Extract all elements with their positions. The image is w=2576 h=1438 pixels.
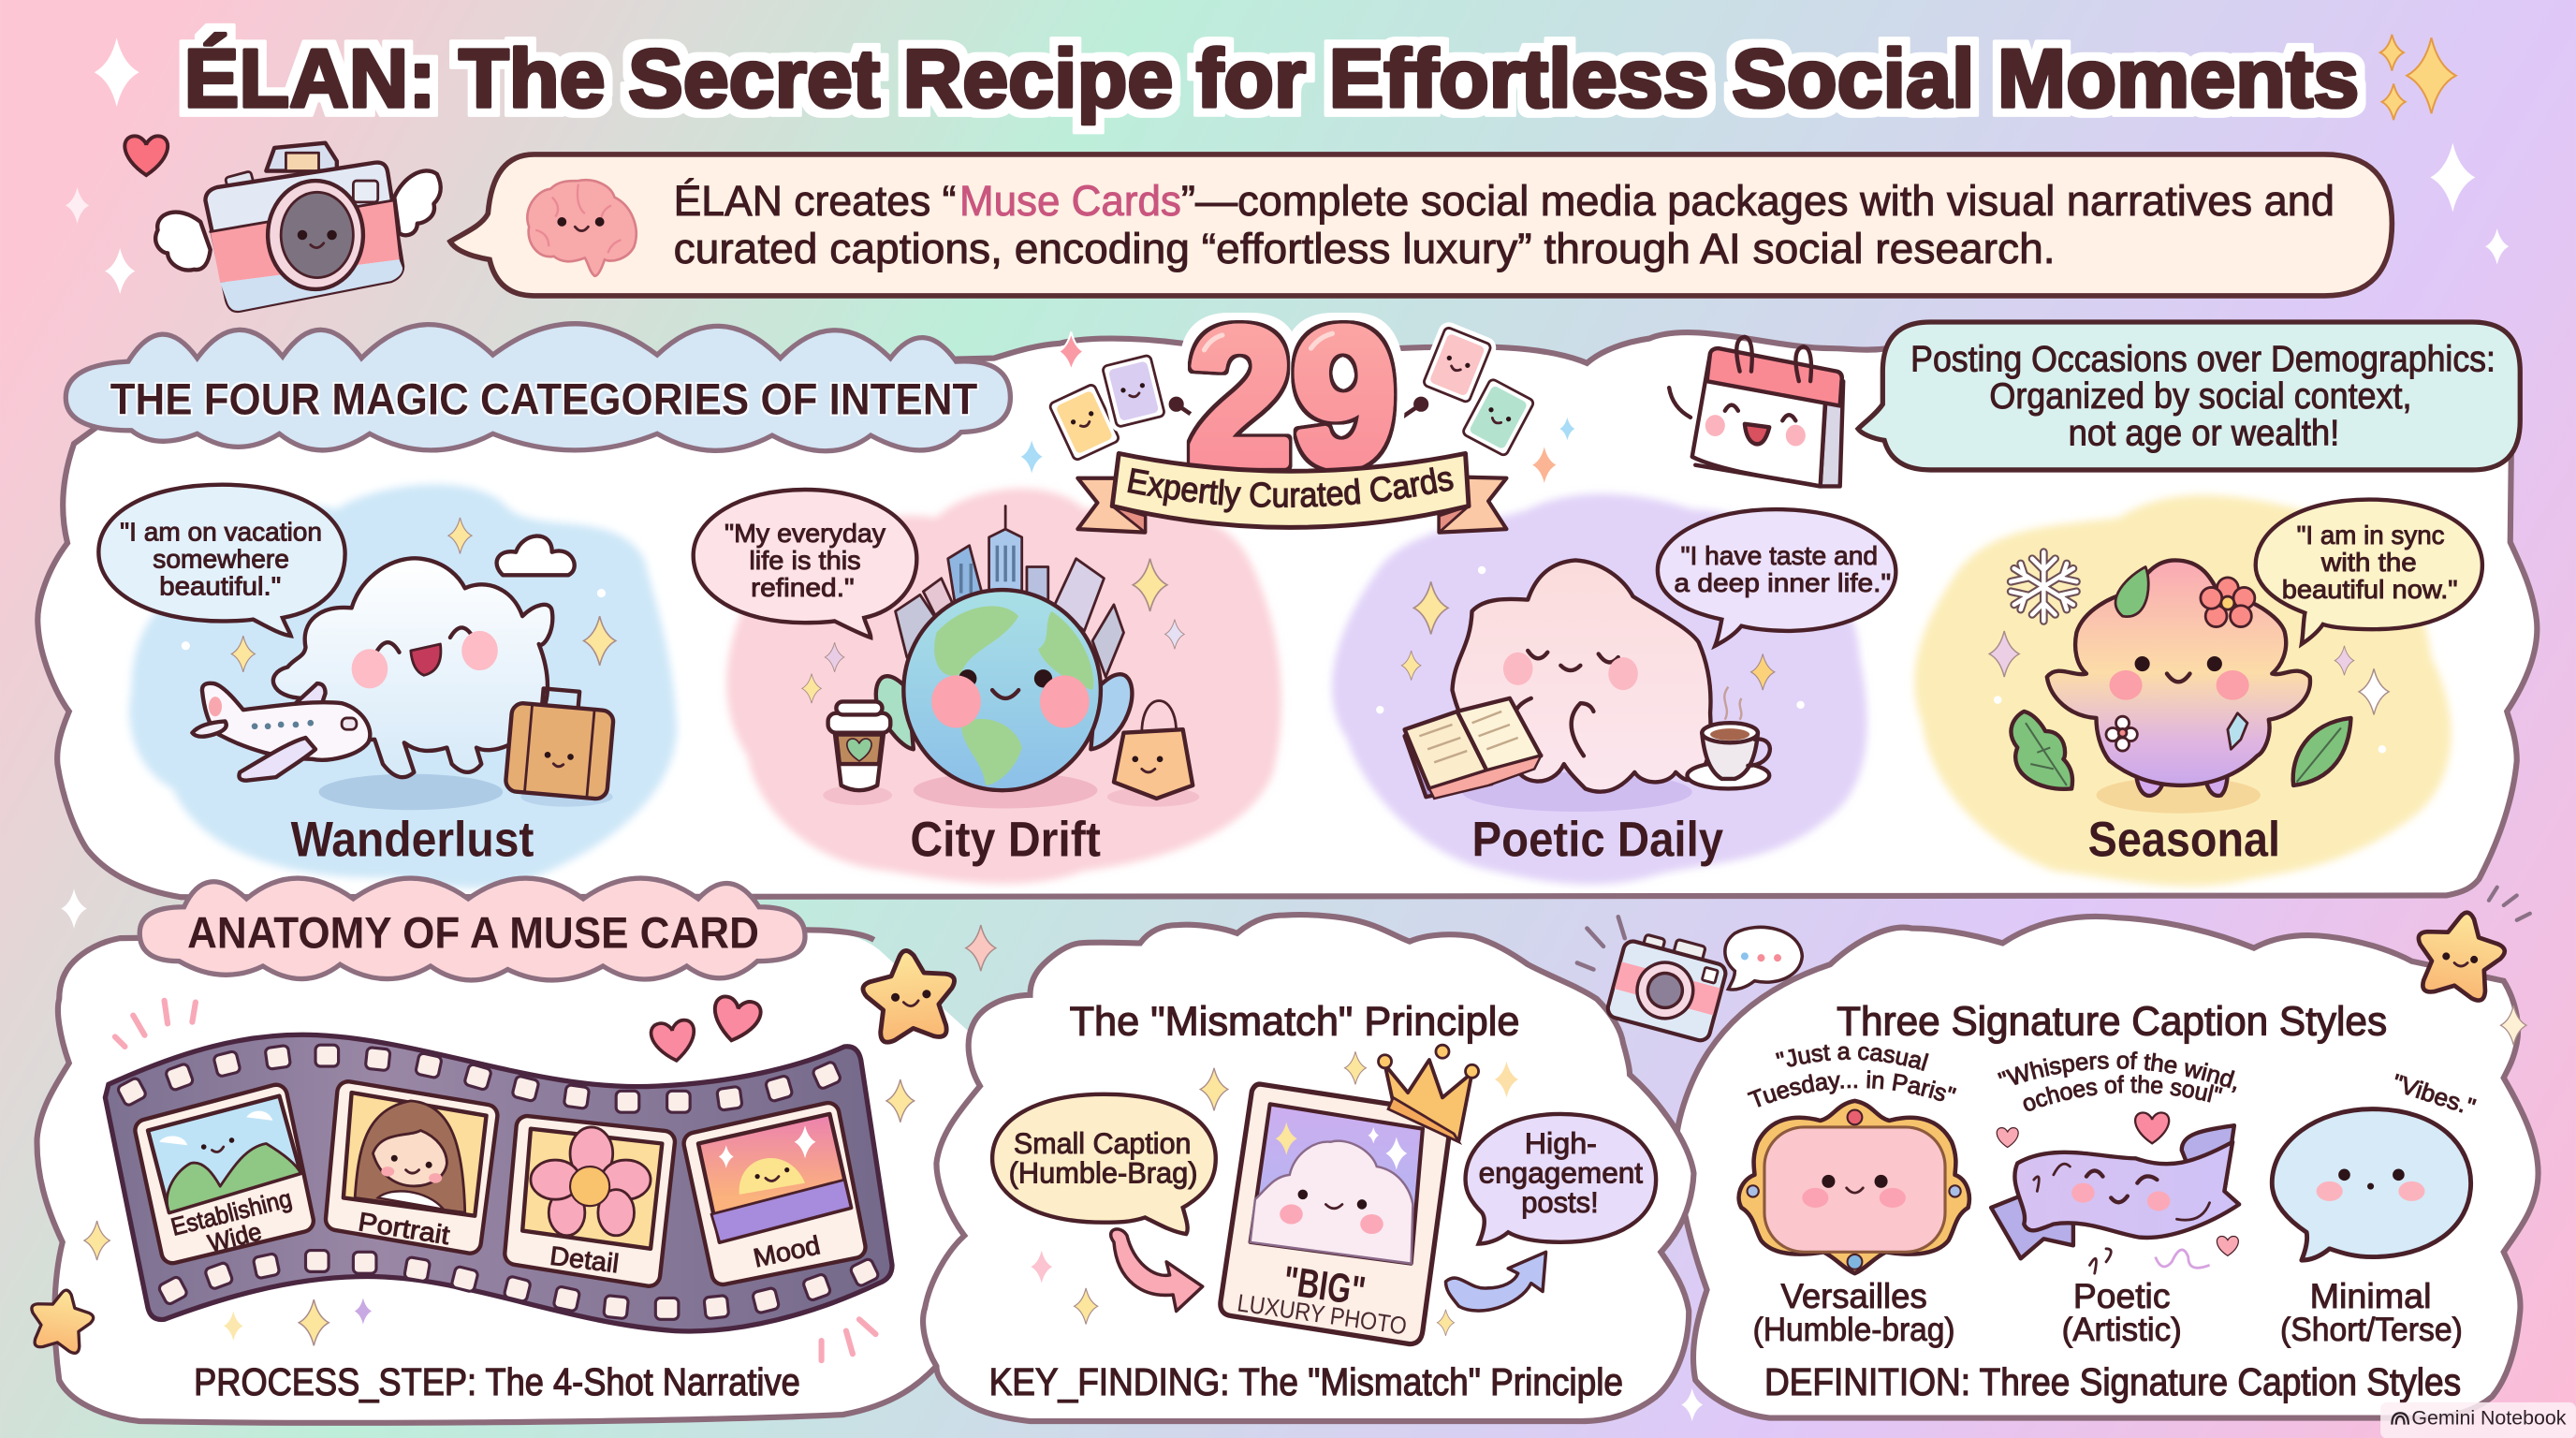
photo card: "BIG" xyxy=(1281,1257,1368,1314)
panel: Poetic Daily xyxy=(1332,493,1895,885)
icon: sparkles around 29 xyxy=(1021,332,1574,483)
frame: establishing wide: Establishing xyxy=(168,1184,295,1241)
panel: City Drift xyxy=(694,489,1281,884)
icon: snowflake xyxy=(2011,552,2076,621)
heading: four magic categories cloud: THE FOUR MAGIC CATEGORIES OF INTENT xyxy=(110,374,977,424)
quote bubble: City Drift: "My everyday xyxy=(724,519,886,548)
icon: sparkles xyxy=(1989,631,2389,754)
icon: suitcase mascot xyxy=(505,686,616,800)
quote bubble: Poetic Daily: a deep inner life." xyxy=(1674,568,1891,597)
caption: key finding: KEY_FINDING: The "Mismatch" Principle xyxy=(989,1360,1623,1403)
icon: sparkles xyxy=(84,1079,915,1345)
frame: mood xyxy=(695,1114,855,1273)
title: ÉLAN: The Secret Recipe for Effortless Social Moments xyxy=(184,33,2359,125)
quote bubble: Seasonal xyxy=(2256,500,2482,644)
small caption bubble: (Humble-Brag) xyxy=(1009,1156,1197,1190)
panel: Wanderlust xyxy=(98,484,677,888)
small caption bubble: Small Caption xyxy=(1014,1126,1191,1160)
style: Poetic xyxy=(1988,1051,2241,1348)
badge: Gemini Notebook: Gemini Notebook xyxy=(2411,1408,2567,1430)
label: Wanderlust: Wanderlust xyxy=(291,812,534,867)
heading: anatomy cloud: ANATOMY OF A MUSE CARD xyxy=(187,909,759,959)
icon: small star bottom left xyxy=(25,1284,97,1356)
quote bubble: Seasonal: "I am in sync xyxy=(2297,521,2445,550)
intro text xyxy=(674,177,2334,272)
label: Seasonal: Seasonal xyxy=(2088,812,2280,867)
icon: gold sparkles beside title xyxy=(2380,35,2456,120)
filmstrip xyxy=(105,1034,892,1331)
callout: 29 expertly curated cards xyxy=(1021,288,1574,535)
photo card xyxy=(1221,1084,1451,1344)
icon: small camera with chat bubble xyxy=(1577,917,1802,1043)
title: mismatch principle: The "Mismatch" Principle xyxy=(1070,999,1519,1045)
frame: detail: Detail xyxy=(549,1241,621,1278)
quote bubble: City Drift: refined." xyxy=(751,573,855,602)
icon: sparkles xyxy=(1031,1051,1518,1336)
panel: intro speech bubble xyxy=(450,154,2392,296)
icon: blue bubble xyxy=(2272,1109,2471,1260)
icon: happy cloud xyxy=(273,558,552,777)
icon: flying mini cards xyxy=(1048,327,1535,461)
engagement bubble: posts! xyxy=(1521,1185,1599,1219)
quote bubble: Poetic Daily xyxy=(1658,509,1895,646)
icon: brain mascot xyxy=(527,180,637,276)
arrow: caption to photo xyxy=(1111,1229,1203,1312)
quote bubble: Wanderlust: somewhere xyxy=(153,544,289,573)
heading: anatomy cloud xyxy=(139,878,805,980)
intro text: ”—complete social media packages with visual narratives and xyxy=(1181,177,2334,225)
ribbon banner xyxy=(1076,451,1509,535)
label: Poetic: Poetic xyxy=(2073,1277,2170,1315)
icon: oak leaf xyxy=(2011,712,2072,789)
caption: definition: DEFINITION: Three Signature Caption Styles xyxy=(1764,1360,2461,1403)
icon: calendar mascot xyxy=(1669,337,1843,486)
callout: posting occasions: Organized by social context, xyxy=(1989,376,2411,417)
callout: posting occasions: Posting Occasions over Demographics: xyxy=(1910,340,2496,380)
icon: teacup xyxy=(1687,687,1770,788)
quote bubble: Seasonal: beautiful now." xyxy=(2282,575,2458,604)
frame: establishing wide xyxy=(146,1096,302,1257)
icon: hearts xyxy=(650,994,763,1064)
icon: shopping bag xyxy=(1114,701,1193,799)
icon: sparkle right edge xyxy=(2501,1005,2526,1045)
panel: mismatch principle xyxy=(923,915,1693,1421)
callout: posting occasions xyxy=(1858,322,2520,470)
panel: anatomy of a muse card xyxy=(37,930,986,1423)
icon: blossom mascot xyxy=(2047,560,2310,796)
title: three signature caption styles: Three Signature Caption Styles xyxy=(1837,999,2387,1045)
label: City Drift: City Drift xyxy=(910,812,1101,867)
icon: skyline xyxy=(896,506,1123,677)
intro text: Muse Cards xyxy=(959,177,1181,225)
style: Minimal: "Vibes." xyxy=(2389,1070,2479,1121)
ribbon banner: Expertly Curated Cards xyxy=(1127,466,1454,513)
icon: small cloud xyxy=(497,536,575,575)
engagement bubble: engagement xyxy=(1479,1156,1643,1190)
quote bubble: City Drift: life is this xyxy=(749,546,861,575)
label: Versailles: Versailles xyxy=(1781,1277,1927,1315)
quote bubble: Poetic Daily: "I have taste and xyxy=(1680,541,1878,570)
quote bubble: Wanderlust: beautiful." xyxy=(159,571,281,600)
icon: coffee cup xyxy=(828,701,890,790)
icon: cute star right xyxy=(2409,888,2530,1004)
icon: sparkles xyxy=(1376,566,1805,713)
frame: portrait xyxy=(337,1093,487,1250)
style: Versailles: (Humble-brag) xyxy=(1753,1312,1955,1348)
icon: winged camera mascot xyxy=(124,136,441,311)
icon: dreaming cloud xyxy=(1453,560,1710,792)
engagement bubble xyxy=(1466,1114,1656,1244)
frame: portrait: Portrait xyxy=(357,1207,452,1250)
quote bubble: City Drift xyxy=(694,490,916,638)
icon: ribbon xyxy=(1991,1113,2239,1273)
style: Versailles: Tuesday... in Paris" xyxy=(1747,1070,1956,1108)
label: Minimal: Minimal xyxy=(2310,1277,2431,1315)
heading: four magic categories cloud xyxy=(66,324,1010,451)
frame: establishing wide: Wide xyxy=(205,1217,264,1257)
style: Minimal xyxy=(2272,1070,2479,1348)
quote bubble: Seasonal: with the xyxy=(2320,548,2417,577)
stat number 29: 29 xyxy=(1188,288,1397,505)
icon: open book xyxy=(1405,698,1541,799)
icon: pink action ticks xyxy=(115,1001,875,1360)
icon: sparkles xyxy=(802,559,1184,703)
panel: four magic categories xyxy=(37,332,2537,898)
frame: detail xyxy=(516,1127,664,1278)
icon: crown xyxy=(1379,1045,1479,1142)
panel: three signature caption styles xyxy=(1676,914,2541,1421)
style: Versailles: "Just a casual xyxy=(1775,1045,1929,1071)
icon: airplane xyxy=(192,683,370,781)
quote bubble: Wanderlust xyxy=(98,485,345,636)
highlights on 29 xyxy=(1204,333,1332,350)
badge: Gemini Notebook xyxy=(2380,1402,2576,1438)
style: Poetic: (Artistic) xyxy=(2062,1312,2182,1348)
arrow: photo to engagement xyxy=(1445,1252,1546,1311)
icon: sparkle near panels xyxy=(966,925,996,971)
callout: posting occasions: not age or wealth! xyxy=(2069,414,2339,454)
style: Poetic: ochoes of the soul" xyxy=(2024,1075,2223,1111)
icon: ornate frame xyxy=(1739,1101,1969,1273)
intro text: ÉLAN creates “ xyxy=(674,177,956,225)
icon: cute star left xyxy=(859,946,960,1044)
icon: sparkles xyxy=(182,518,616,672)
icon: globe mascot xyxy=(876,590,1132,790)
label: Poetic Daily: Poetic Daily xyxy=(1472,812,1723,867)
icon: leaf xyxy=(2293,718,2351,785)
quote bubble: Wanderlust: "I am on vacation xyxy=(120,517,322,546)
style: Poetic: "Whispers of the wind, xyxy=(1998,1051,2237,1093)
panel: Seasonal xyxy=(1914,495,2482,886)
icon: arms of 29 xyxy=(1169,397,1428,426)
engagement bubble: High- xyxy=(1525,1126,1597,1160)
frame: mood: Mood xyxy=(751,1230,823,1272)
sprocket holes xyxy=(117,1045,880,1319)
style: Versailles xyxy=(1736,1045,1971,1348)
photo card: LUXURY PHOTO xyxy=(1236,1288,1409,1340)
small caption bubble xyxy=(992,1094,1216,1234)
intro text: curated captions, encoding “effortless luxury” through AI social research. xyxy=(674,225,2056,272)
style: Minimal: (Short/Terse) xyxy=(2280,1312,2463,1348)
caption: process step: PROCESS_STEP: The 4-Shot Narrative xyxy=(194,1360,800,1403)
